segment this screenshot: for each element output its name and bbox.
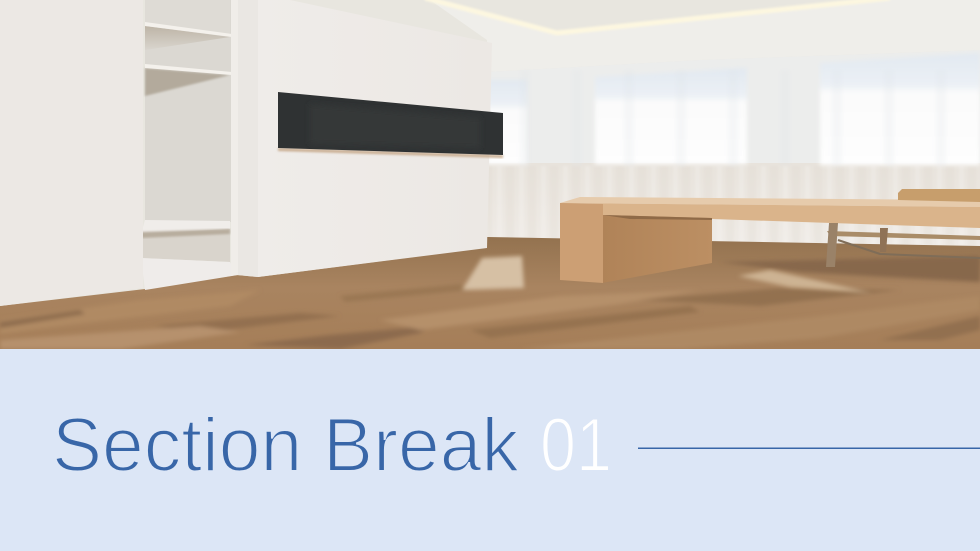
table (560, 197, 980, 283)
heading: Section Break (52, 403, 520, 488)
main wall (258, 0, 492, 277)
title band (52, 403, 980, 488)
wall post (232, 0, 258, 277)
ceiling (0, 0, 980, 349)
background band (0, 349, 980, 551)
rule line (638, 448, 980, 449)
ceiling light strip (425, 0, 890, 33)
bench (826, 189, 980, 267)
floor reflections (462, 256, 524, 290)
curtains (487, 50, 980, 247)
dark wall panel (278, 92, 503, 158)
bright windows (487, 53, 980, 165)
floor (0, 237, 980, 349)
photo: interior room with wooden floor, wall unit, table and curtains (0, 0, 980, 349)
shelving unit (141, 0, 238, 290)
left wall panel (0, 0, 143, 306)
section number: 01 (540, 403, 612, 488)
